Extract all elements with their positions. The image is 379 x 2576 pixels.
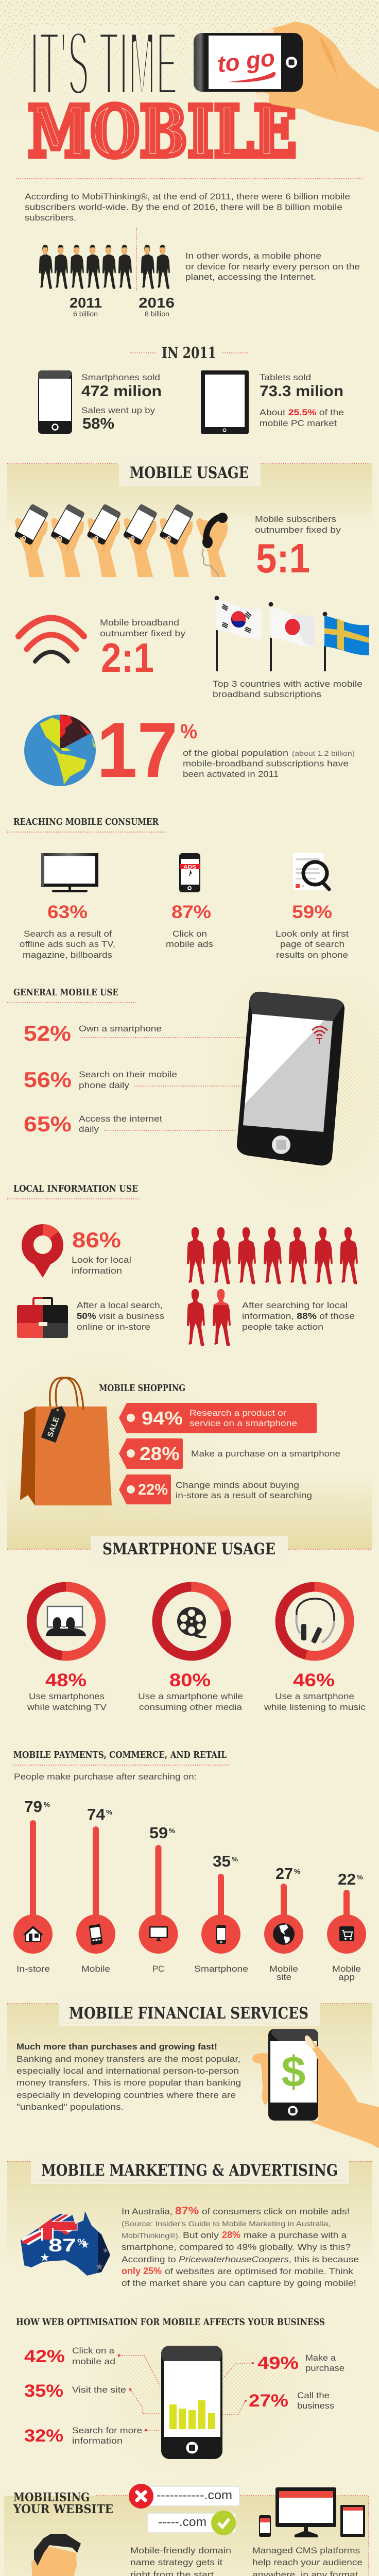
stat: 59 percent: page of search	[280, 939, 344, 949]
stat: 48 percent: Use smartphones	[29, 1691, 105, 1701]
value: 74 percent	[87, 1805, 112, 1823]
tag: 22 percent	[119, 1475, 312, 1504]
tag: 28 percent: Make a purchase on a smartphone	[191, 1449, 340, 1459]
tag: 28 percent	[119, 1438, 340, 1469]
heading: in 2011: IN 2011	[162, 344, 216, 362]
text: top 3 countries	[213, 679, 363, 699]
people pictogram: 6 and 8 billion: 8 billion	[145, 310, 169, 318]
axis labels: PC	[152, 1964, 164, 1974]
stat: 17 percent: (about 1.2 billion)	[292, 749, 355, 757]
tag: 22 percent: 22%	[138, 1481, 168, 1498]
title word: Mobile: MOBILE	[28, 91, 297, 173]
stat: 59 percent: Look only at first	[275, 929, 349, 939]
stat: 56 percent search daily: Search on their mobile	[79, 1070, 177, 1079]
icon: house	[23, 1926, 43, 1942]
people pictogram: 6 and 8 billion: 2011	[70, 295, 102, 311]
icon: map pin	[22, 1224, 63, 1278]
text: financial body	[16, 2042, 241, 2112]
text: smartphones sold: Sales went up by	[81, 405, 156, 415]
tag: 22 percent: Change minds about buying	[176, 1480, 299, 1490]
icon: tablet	[201, 370, 249, 434]
text: financial body: especially local and international person-to-person	[16, 2066, 239, 2076]
icon: large tilted smartphone	[237, 992, 344, 1165]
value: 79 percent: %	[44, 1801, 50, 1808]
text: australia body: of the market share you can capture by going mobile!	[122, 2278, 356, 2288]
axis labels: Mobile	[81, 1964, 110, 1974]
icon: hand holding phone with dollar	[252, 2029, 379, 2148]
stat: 86 percent: 86%	[72, 1228, 121, 1252]
icon: long domain rejected	[129, 2484, 239, 2509]
axis labels: In-store	[16, 1964, 50, 1974]
stat: 63 percent: offline ads such as TV,	[20, 939, 115, 949]
heading: mobilising your website	[13, 2490, 113, 2516]
callout: 32 percent	[24, 2426, 161, 2446]
stat: 65 percent internet daily: daily	[79, 1124, 99, 1134]
text: tablets sold: Tablets sold	[260, 372, 311, 382]
text: australia body: MobiThinking®).	[122, 2231, 180, 2240]
text: financial body: money transfers. This is more popular than banking	[16, 2078, 241, 2088]
subheading: local information use: LOCAL INFORMATION USE	[13, 1183, 138, 1194]
people pictogram: 6 and 8 billion: 2016	[139, 295, 175, 311]
lollipop chart	[13, 1798, 366, 1954]
intro text: subscribers world-wide. By the end of 2016, there will be 8 billion mobile	[25, 202, 342, 212]
stat: 63 percent: Search as a result of	[24, 929, 112, 939]
icon: magnifier on search page	[293, 853, 329, 890]
text: australia body: make a purchase with a	[244, 2230, 347, 2240]
panel: mobile usage	[0, 458, 379, 1556]
text: australia body	[122, 2205, 359, 2288]
callout: 49 percent	[223, 2353, 344, 2378]
stat: 46 percent: 46%	[293, 1670, 335, 1690]
text: tablets sold: 73.3 milion	[260, 383, 343, 400]
stat: 87 percent: Click on	[173, 929, 207, 939]
stat: 46 percent	[264, 1670, 366, 1712]
text: australia body: But only	[183, 2230, 219, 2240]
stat: 46 percent: while listening to music	[264, 1702, 366, 1712]
stat: 86 percent: Look for local	[72, 1255, 131, 1265]
stat: 48 percent: while watching TV	[27, 1702, 107, 1712]
text: australia body: of websites are optimised for mobile. Think	[165, 2266, 354, 2276]
subheading: how web optimisation: HOW WEB OPTIMISATION FOR MOBILE AFFECTS YOUR BUSINESS	[16, 2317, 325, 2328]
title word: Mobile: MOBILE	[28, 91, 297, 173]
donut: 46 percent listening to music	[280, 1587, 349, 1656]
text: tablets sold: About 25.5% of the	[260, 408, 344, 417]
callout: 42 percent: Click on a	[72, 2346, 115, 2355]
callout: 27 percent: business	[297, 2401, 334, 2411]
stat: 17 percent: mobile-broadband subscriptions have	[183, 758, 349, 769]
people pictogram: 6 and 8 billion: 6 billion	[73, 310, 98, 318]
icon: short domain approved	[148, 2511, 236, 2535]
text: top 3 countries: broadband subscriptions	[213, 689, 321, 699]
callout: 32 percent: Search for more	[72, 2426, 142, 2435]
stat: 2:1	[100, 618, 186, 681]
stat: 52 percent own a smartphone: Own a smartphone	[79, 1024, 162, 1033]
icon: mobile phone	[89, 1924, 103, 1945]
callout: 27 percent: Call the	[297, 2391, 330, 2400]
value: 59 percent	[149, 1824, 175, 1842]
heading: mobile financial services: MOBILE FINANCIAL SERVICES	[69, 2004, 308, 2023]
callout: 32 percent: information	[72, 2436, 123, 2446]
icon: australia map flag	[21, 2210, 113, 2277]
stat: 63 percent	[20, 902, 115, 960]
stat: 48 percent: 48%	[45, 1670, 87, 1690]
panel: mobile financial services	[7, 1998, 379, 2148]
title word: Mobile: MOBILE	[28, 91, 297, 173]
stat: 52 percent own a smartphone: 52%	[24, 1021, 71, 1045]
stat: 87 percent	[166, 902, 213, 949]
stat: 5:1: outnumber fixed by	[255, 525, 341, 535]
value: 59 percent: %	[169, 1827, 175, 1835]
icon: phone with bar chart	[161, 2346, 222, 2459]
icon: smartphone	[216, 1925, 226, 1944]
icon: five mobile hands and one landline hand	[14, 503, 228, 577]
axis labels: site	[277, 1972, 291, 1982]
callout: 35 percent: 35%	[24, 2381, 63, 2401]
callout: 32 percent: 32%	[24, 2426, 63, 2446]
stat: 5:1	[255, 514, 341, 581]
stat: 80 percent: Use a smartphone while	[138, 1691, 243, 1701]
text: after a local search: 50% visit a business	[77, 1311, 164, 1321]
callout: 35 percent: Visit the site	[72, 2385, 126, 2395]
stat: 86 percent	[72, 1228, 131, 1276]
icon: phone with ads: ADS	[183, 864, 196, 870]
text: in other words	[185, 251, 360, 282]
stat: 52 percent own a smartphone	[24, 1021, 245, 1045]
intro text: subscribers.	[25, 213, 76, 223]
stat: 63 percent: 63%	[47, 902, 88, 922]
callout: 42 percent: mobile ad	[72, 2357, 115, 2366]
text: smartphones sold	[81, 372, 162, 432]
text: tablets sold: mobile PC market	[260, 418, 337, 428]
text: financial body: "unbanked" populations.	[16, 2102, 124, 2112]
panel: mobile payments, commerce, and retail	[13, 1750, 366, 1982]
stat: 65 percent internet daily	[24, 1112, 237, 1136]
icon: hand holding phone: to go	[216, 44, 277, 78]
axis labels: Mobile	[269, 1964, 298, 1974]
text: australia body: smartphone, compared to 49% globally. Why is this?	[122, 2242, 351, 2252]
icon: globe	[273, 1923, 295, 1945]
text: tablets sold	[260, 372, 344, 428]
text: domain name strategy: Mobile-friendly domain	[130, 2546, 231, 2555]
value: 59 percent: 59	[149, 1824, 168, 1842]
subheading: reaching mobile consumer: REACHING MOBILE CONSUMER	[13, 817, 159, 827]
icon: hand holding phone with dollar: $	[282, 2047, 305, 2096]
tag: 94 percent: service on a smartphone	[190, 1418, 297, 1428]
icon: globe with 17 percent wedge	[24, 711, 96, 786]
value: 22 percent: %	[357, 1873, 363, 1881]
stat: 2:1: outnumber fixed by	[100, 629, 186, 638]
stat: 63 percent: magazine, billboards	[23, 950, 112, 960]
stat: 87 percent: 87%	[171, 902, 211, 922]
text: domain name strategy	[130, 2546, 231, 2576]
tag: 94 percent	[119, 1403, 317, 1433]
callout: 49 percent: purchase	[305, 2363, 344, 2373]
value: 22 percent: 22	[338, 1870, 356, 1888]
intro text: According to MobiThinking®, at the end of 2011, there were 6 billion mobile	[25, 192, 350, 201]
panel: mobilising your website	[0, 2484, 369, 2576]
stat: 87 percent: mobile ads	[166, 939, 213, 949]
illustration: businessman with phone	[0, 2534, 126, 2576]
callout: 49 percent: Make a	[305, 2353, 336, 2363]
icon: shopping cart	[339, 1926, 354, 1941]
text: after searching	[242, 1300, 355, 1332]
stat: 80 percent: 80%	[169, 1670, 211, 1690]
value: 79 percent	[24, 1798, 50, 1816]
text: after searching: information, 88% of those	[242, 1311, 355, 1321]
text: australia body: In Australia,	[122, 2207, 173, 2216]
icon: short domain approved: -----.com	[158, 2515, 206, 2529]
text: domain name strategy: name strategy gets it	[130, 2557, 222, 2567]
icon: smartphone	[38, 370, 72, 434]
title line: It's time: IT'S TIME	[30, 9, 178, 117]
value: 79 percent: 79	[24, 1798, 42, 1816]
value: 22 percent	[338, 1870, 363, 1888]
stat: 59 percent: 59%	[292, 902, 332, 922]
intro text	[25, 192, 350, 223]
callout: 27 percent: 27%	[249, 2391, 288, 2411]
stat: 17 percent: %	[180, 720, 197, 743]
stat: 80 percent	[138, 1670, 243, 1712]
text: top 3 countries: Top 3 countries with active mobile	[213, 679, 363, 689]
value: 35 percent: 35	[213, 1852, 231, 1870]
stat: 17 percent	[97, 706, 355, 794]
icon: three flags	[214, 596, 369, 671]
text: australia body: 87%	[175, 2205, 199, 2217]
subheading: general mobile use: GENERAL MOBILE USE	[13, 987, 118, 998]
heading: mobile marketing and advertising	[31, 2156, 349, 2184]
stat: 17 percent: of the global population	[183, 748, 288, 758]
icon: desktop monitor	[149, 1926, 168, 1941]
text: in other words: or device for nearly every person on the	[185, 262, 360, 272]
text: financial body: Banking and money transfers are the most popular,	[16, 2054, 240, 2064]
text: financial body: Much more than purchases and growing fast!	[16, 2042, 217, 2052]
text: smartphones sold: 472 milion	[81, 383, 162, 400]
value: 27 percent: %	[294, 1868, 300, 1875]
stat: 2:1: Mobile broadband	[100, 618, 179, 628]
text: in other words: planet, accessing the Internet.	[185, 272, 316, 282]
stat: 2:1: 2:1	[101, 635, 154, 681]
people pictogram: 88 percent	[187, 1227, 358, 1346]
stat: 65 percent internet daily: Access the internet	[79, 1114, 162, 1124]
icon: shopping bag: SALE	[46, 1416, 61, 1438]
callout: 42 percent: 42%	[24, 2347, 65, 2366]
heading: smartphone usage	[91, 1536, 288, 1561]
icon: devices	[259, 2487, 365, 2537]
text: managed cms: help reach your audience	[252, 2557, 363, 2567]
heading: mobile financial services	[59, 1998, 320, 2026]
stat: 59 percent: results on phone	[276, 950, 348, 960]
stat: 17 percent: 17	[97, 706, 178, 794]
icon: briefcase	[17, 1298, 68, 1338]
text: after a local search: After a local search,	[77, 1300, 163, 1310]
text: financial body: especially in developing countries where there are	[16, 2090, 236, 2100]
stat: 5:1: Mobile subscribers	[255, 514, 336, 524]
icon: hand holding phone	[194, 22, 379, 132]
value: 35 percent	[213, 1852, 238, 1870]
callout: 49 percent: 49%	[257, 2353, 299, 2373]
axis labels	[16, 1964, 361, 1982]
text: in other words: In other words, a mobile phone	[185, 251, 321, 261]
text: smartphones sold: Smartphones sold	[81, 372, 160, 382]
text: australia body: According to PricewaterhouseCoopers , this is because	[122, 2255, 359, 2264]
text: after a local search	[77, 1300, 164, 1332]
tag: 94 percent: 94%	[142, 1408, 183, 1429]
axis labels: app	[338, 1972, 355, 1982]
text: after a local search: online or in-store	[77, 1322, 150, 1332]
stat: 17 percent: been activated in 2011	[183, 769, 279, 779]
stat: 48 percent	[27, 1670, 107, 1712]
text: managed cms	[252, 2546, 363, 2576]
donut: 80 percent other media	[157, 1587, 226, 1656]
text: australia body: of consumers click on mobile ads!	[202, 2207, 350, 2216]
icon: australia map flag: 87	[48, 2235, 76, 2256]
subheading: mobile shopping: MOBILE SHOPPING	[99, 1383, 185, 1394]
heading: mobile usage	[119, 458, 261, 486]
callout: 42 percent	[24, 2346, 161, 2387]
heading: mobilising your website: MOBILISING	[13, 2490, 90, 2504]
panel: smartphone usage	[7, 1536, 372, 1712]
panel: title hero	[16, 9, 379, 318]
axis labels: Smartphone	[194, 1964, 248, 1974]
icon: wifi arcs	[19, 618, 84, 662]
subheading: mobile payments: MOBILE PAYMENTS, COMMERCE, AND RETAIL	[13, 1750, 227, 1760]
value: 74 percent: %	[106, 1808, 112, 1816]
text: people make purchase: People make purchase after searching on:	[14, 1772, 197, 1782]
stat: 59 percent	[275, 902, 349, 960]
people pictogram: 6 and 8 billion	[39, 228, 175, 318]
icon: long domain rejected: -----------.com	[157, 2488, 232, 2502]
stat: 46 percent: Use a smartphone	[275, 1691, 354, 1701]
text: smartphones sold: 58%	[82, 415, 114, 432]
icon: shopping bag	[20, 1378, 112, 1505]
value: 74 percent: 74	[87, 1805, 106, 1823]
text: managed cms: Managed CMS platforms	[252, 2546, 360, 2555]
donut: 48 percent while watching tv	[32, 1587, 101, 1656]
stat: 56 percent search daily: 56%	[24, 1067, 72, 1092]
text: after searching: After searching for local	[242, 1300, 348, 1310]
stat: 80 percent: consuming other media	[139, 1702, 243, 1712]
value: 35 percent: %	[232, 1855, 238, 1863]
tag: 22 percent: in-store as a result of searching	[176, 1490, 312, 1500]
heading: smartphone usage: SMARTPHONE USAGE	[102, 1540, 275, 1558]
stat: 65 percent internet daily: 65%	[24, 1112, 72, 1136]
icon: tv	[41, 853, 98, 892]
stat: 86 percent: information	[72, 1266, 122, 1276]
heading: mobilising your website: YOUR WEBSITE	[13, 2502, 113, 2516]
section: in 2011	[38, 344, 344, 434]
stat: 56 percent search daily	[24, 1067, 242, 1092]
heading: mobile usage: MOBILE USAGE	[130, 464, 249, 482]
stat: 5:1: 5:1	[256, 535, 310, 581]
text: australia body: (Source: Insider's Guide to Mobile Marketing in Australia,	[122, 2219, 331, 2228]
panel: mobile marketing and advertising	[7, 2156, 372, 2488]
text: after searching: people take action	[242, 1322, 323, 1332]
value: 27 percent: 27	[275, 1865, 293, 1883]
callout: 35 percent	[24, 2381, 161, 2414]
callout: 27 percent	[222, 2391, 334, 2415]
stat: 56 percent search daily: phone daily	[79, 1080, 130, 1090]
axis labels: Mobile	[332, 1964, 361, 1974]
icon: australia map flag: %	[77, 2237, 87, 2247]
icon: phone with ads	[179, 853, 200, 892]
text: australia body: only 25%	[122, 2266, 162, 2276]
tag: 28 percent: 28%	[140, 1443, 180, 1464]
text: australia body: 28%	[222, 2230, 240, 2240]
tag: 94 percent: Research a product or	[190, 1408, 286, 1418]
